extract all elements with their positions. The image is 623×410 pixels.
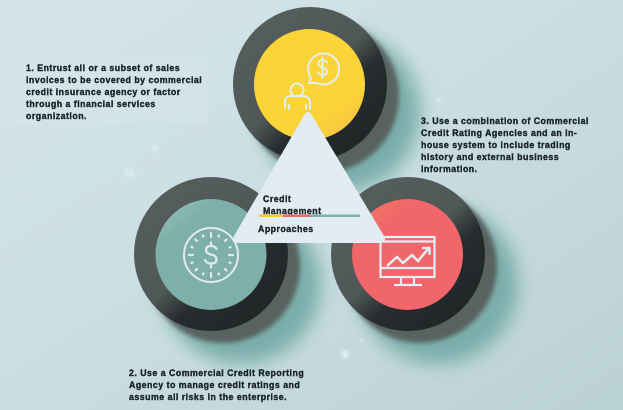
text block: step 2 [129, 368, 304, 402]
icon: dollar clock [184, 228, 238, 282]
text block: step 3: 3. Use a combination of Commercial [421, 116, 589, 126]
text block: step 1: organization. [26, 111, 87, 121]
triangle heading: Management [263, 206, 322, 216]
shadow: top circle [245, 19, 420, 192]
text block: step 1: through a financial services [26, 99, 156, 109]
triangle heading: Credit [263, 194, 291, 204]
shadow: right circle [343, 189, 518, 364]
panel: left circle with teal disc [134, 177, 288, 331]
panel: top circle with yellow disc [233, 7, 387, 161]
triangle panel [233, 112, 385, 243]
text block: step 3: Credit Rating Agencies and an in- [421, 128, 577, 138]
text block: step 1: invoices to be covered by commercial [26, 75, 202, 85]
text block: step 2: assume all risks in the enterprise. [129, 392, 287, 402]
icon: person with dollar speech bubble [285, 53, 339, 109]
text block: step 1: 1. Entrust all or a subset of sales [26, 63, 180, 73]
text block: step 3: house system to include trading [421, 140, 571, 150]
triangle heading [258, 194, 322, 234]
text block: step 3 [421, 116, 589, 174]
text block: step 2: Agency to manage credit ratings and [129, 380, 300, 390]
triangle heading: Approaches [258, 224, 314, 234]
text block: step 3: information. [421, 164, 478, 174]
text block: step 2: 2. Use a Commercial Credit Reporting [129, 368, 304, 378]
underline: tri-colour [259, 214, 360, 217]
text block: step 3: history and external business [421, 152, 559, 162]
text block: step 1 [14, 56, 208, 124]
text block: step 1: credit insurance agency or factor [26, 87, 181, 97]
background soft spots [125, 80, 440, 358]
icon: monitor with rising chart [380, 237, 434, 285]
panel: right circle with red disc [331, 177, 485, 331]
shadow: left circle [146, 189, 321, 364]
